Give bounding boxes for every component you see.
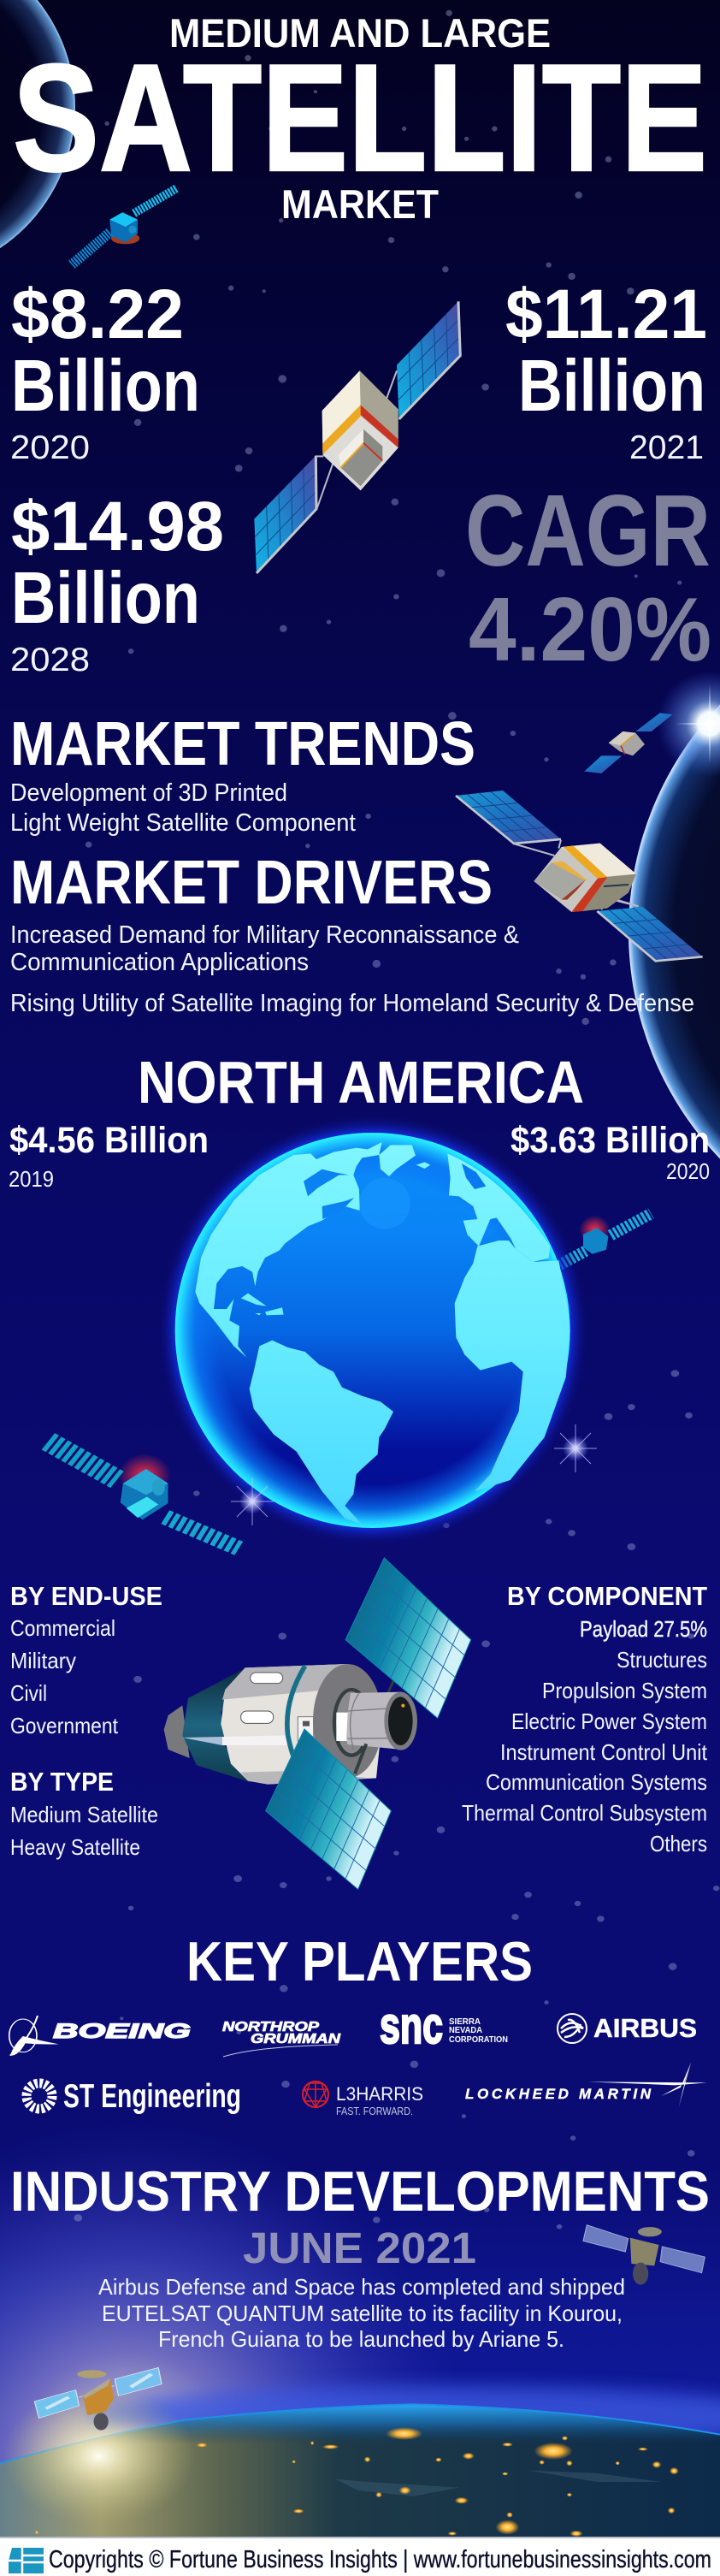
logo: L3Harris: FAST. FORWARD. xyxy=(336,2105,413,2117)
stat: 2028 market size: 2028 xyxy=(10,642,90,678)
heading: market trends: MARKET TRENDS xyxy=(10,710,475,779)
list: by end-use: Commercial xyxy=(10,1615,115,1641)
logo: Northrop Grumman xyxy=(222,2020,341,2057)
icon: sparkle stars xyxy=(231,1424,597,1525)
land: north america xyxy=(195,1142,382,1358)
logo: Lockheed Martin: LOCKHEED MARTIN xyxy=(465,2086,652,2102)
list: by component: Structures xyxy=(617,1647,707,1673)
logo: L3Harris: L3HARRIS xyxy=(336,2083,423,2105)
list: by end-use: Civil xyxy=(10,1680,47,1706)
text: development detail: EUTELSAT QUANTUM satellite to its facility in Kourou, xyxy=(102,2301,623,2326)
list: by type: Heavy Satellite xyxy=(10,1834,140,1860)
stat: 2028 market size xyxy=(10,488,224,678)
logo: Northrop Grumman: NORTHROP xyxy=(222,2020,319,2034)
stat: CAGR: 4.20% xyxy=(469,579,711,680)
stat: CAGR xyxy=(465,474,711,680)
icon: cyan satellite left of globe xyxy=(48,1442,239,1549)
stat: 2020 north america xyxy=(510,1120,710,1184)
logo: SNC: NEVADA xyxy=(449,2026,482,2035)
logo: ST Engineering xyxy=(27,2078,241,2115)
planet: top left xyxy=(0,0,75,277)
logo: Northrop Grumman: GRUMMAN xyxy=(251,2032,341,2046)
land: europe xyxy=(447,1153,550,1262)
stat: 2021 market size: $11.21 xyxy=(505,275,707,353)
icon: main satellite xyxy=(254,301,460,573)
heading: north america: NORTH AMERICA xyxy=(138,1049,584,1116)
stat: 2021 market size xyxy=(505,275,707,466)
list: by component: BY COMPONENT xyxy=(507,1581,707,1611)
title: MEDIUM AND LARGE xyxy=(169,10,551,56)
stat: 2020 north america: 2020 xyxy=(666,1158,710,1184)
icon: gold satellite lower left xyxy=(34,2367,162,2431)
icon: small satellite near flare xyxy=(584,713,673,773)
stat: 2020 market size xyxy=(10,275,200,466)
icon: space station satellite xyxy=(164,1558,471,1889)
stat: 2020 market size: $8.22 xyxy=(11,275,184,353)
stat: 2021 market size: 2021 xyxy=(629,429,704,466)
logo: SNC: snc xyxy=(380,1997,443,2054)
icon: cyan satellite right of globe xyxy=(559,1213,651,1265)
planet: right with sun flare xyxy=(629,604,720,1259)
heading: June 2021: JUNE 2021 xyxy=(243,2224,476,2272)
list: by end-use: Government xyxy=(10,1713,119,1738)
list: by end-use: Military xyxy=(10,1648,76,1673)
text: market driver detail: Rising Utility of Satellite Imaging for Homeland Security & Defense xyxy=(10,990,694,1017)
land: africa xyxy=(455,1241,570,1491)
logo: SNC: SIERRA xyxy=(449,2017,481,2027)
list: by type xyxy=(10,1767,158,1860)
text: market trend detail: Development of 3D Printed xyxy=(10,779,287,807)
text: market driver detail: Communication Applications xyxy=(10,949,309,976)
text: market trend detail xyxy=(10,779,356,837)
water: baltic xyxy=(462,1164,486,1189)
chart: glowing globe xyxy=(157,1115,588,1546)
land: south america xyxy=(250,1341,393,1525)
title: MARKET xyxy=(281,181,439,227)
icon: dim satellite upper right xyxy=(583,2225,705,2285)
logo: ST Engineering: ST Engineering xyxy=(63,2078,241,2115)
logo: Fortune Business Insights mark xyxy=(9,2548,44,2573)
stat: 2019 north america: 2019 xyxy=(9,1166,54,1192)
text: development detail: French Guiana to be launched by Ariane 5. xyxy=(158,2326,564,2352)
logo: L3Harris xyxy=(303,2082,423,2117)
list: by end-use xyxy=(10,1581,162,1738)
stat: 2020 north america: $3.63 Billion xyxy=(510,1120,710,1161)
list: by component: Others xyxy=(650,1831,707,1856)
list: by type: Medium Satellite xyxy=(10,1802,158,1827)
water: hudson bay and gulf of st lawrence xyxy=(304,1170,354,1219)
text: development detail xyxy=(98,2274,625,2352)
logo: SNC xyxy=(380,1997,508,2054)
illustration: earth horizon with city lights xyxy=(0,2387,720,2538)
stat: 2020 market size: Billion xyxy=(11,346,200,427)
stat: 2019 north america: $4.56 Billion xyxy=(9,1120,209,1161)
icon: small cyan satellite xyxy=(72,188,177,264)
logo: Boeing xyxy=(9,2016,191,2056)
heading: key players: KEY PLAYERS xyxy=(186,1930,533,1993)
list: by component xyxy=(462,1581,708,1856)
stat: 2019 north america xyxy=(9,1120,209,1192)
text: market trend detail: Light Weight Satellite Component xyxy=(10,809,356,837)
logo: Airbus: AIRBUS xyxy=(593,2013,697,2043)
text: development detail: Airbus Defense and Space has completed and shipped xyxy=(98,2274,625,2300)
logo: Lockheed Martin xyxy=(465,2063,707,2119)
text: market driver detail: Increased Demand for Military Reconnaissance & xyxy=(10,921,519,949)
logo: SNC: CORPORATION xyxy=(449,2035,508,2045)
footer band xyxy=(0,2537,720,2576)
list: by end-use: BY END-USE xyxy=(10,1581,162,1611)
text: market driver detail xyxy=(10,921,694,1017)
stat: 2028 market size: $14.98 xyxy=(11,488,224,566)
stat: 2028 market size: Billion xyxy=(11,558,200,639)
heading: market drivers: MARKET DRIVERS xyxy=(10,849,493,917)
icon: large satellite near planet xyxy=(456,791,703,961)
list: by type: BY TYPE xyxy=(10,1767,114,1797)
logo: Boeing: BOEING xyxy=(53,2020,191,2043)
land: greenland and iceland xyxy=(379,1145,430,1176)
land: caribbean islands xyxy=(241,1294,284,1315)
stat: 2020 market size: 2020 xyxy=(10,429,90,466)
